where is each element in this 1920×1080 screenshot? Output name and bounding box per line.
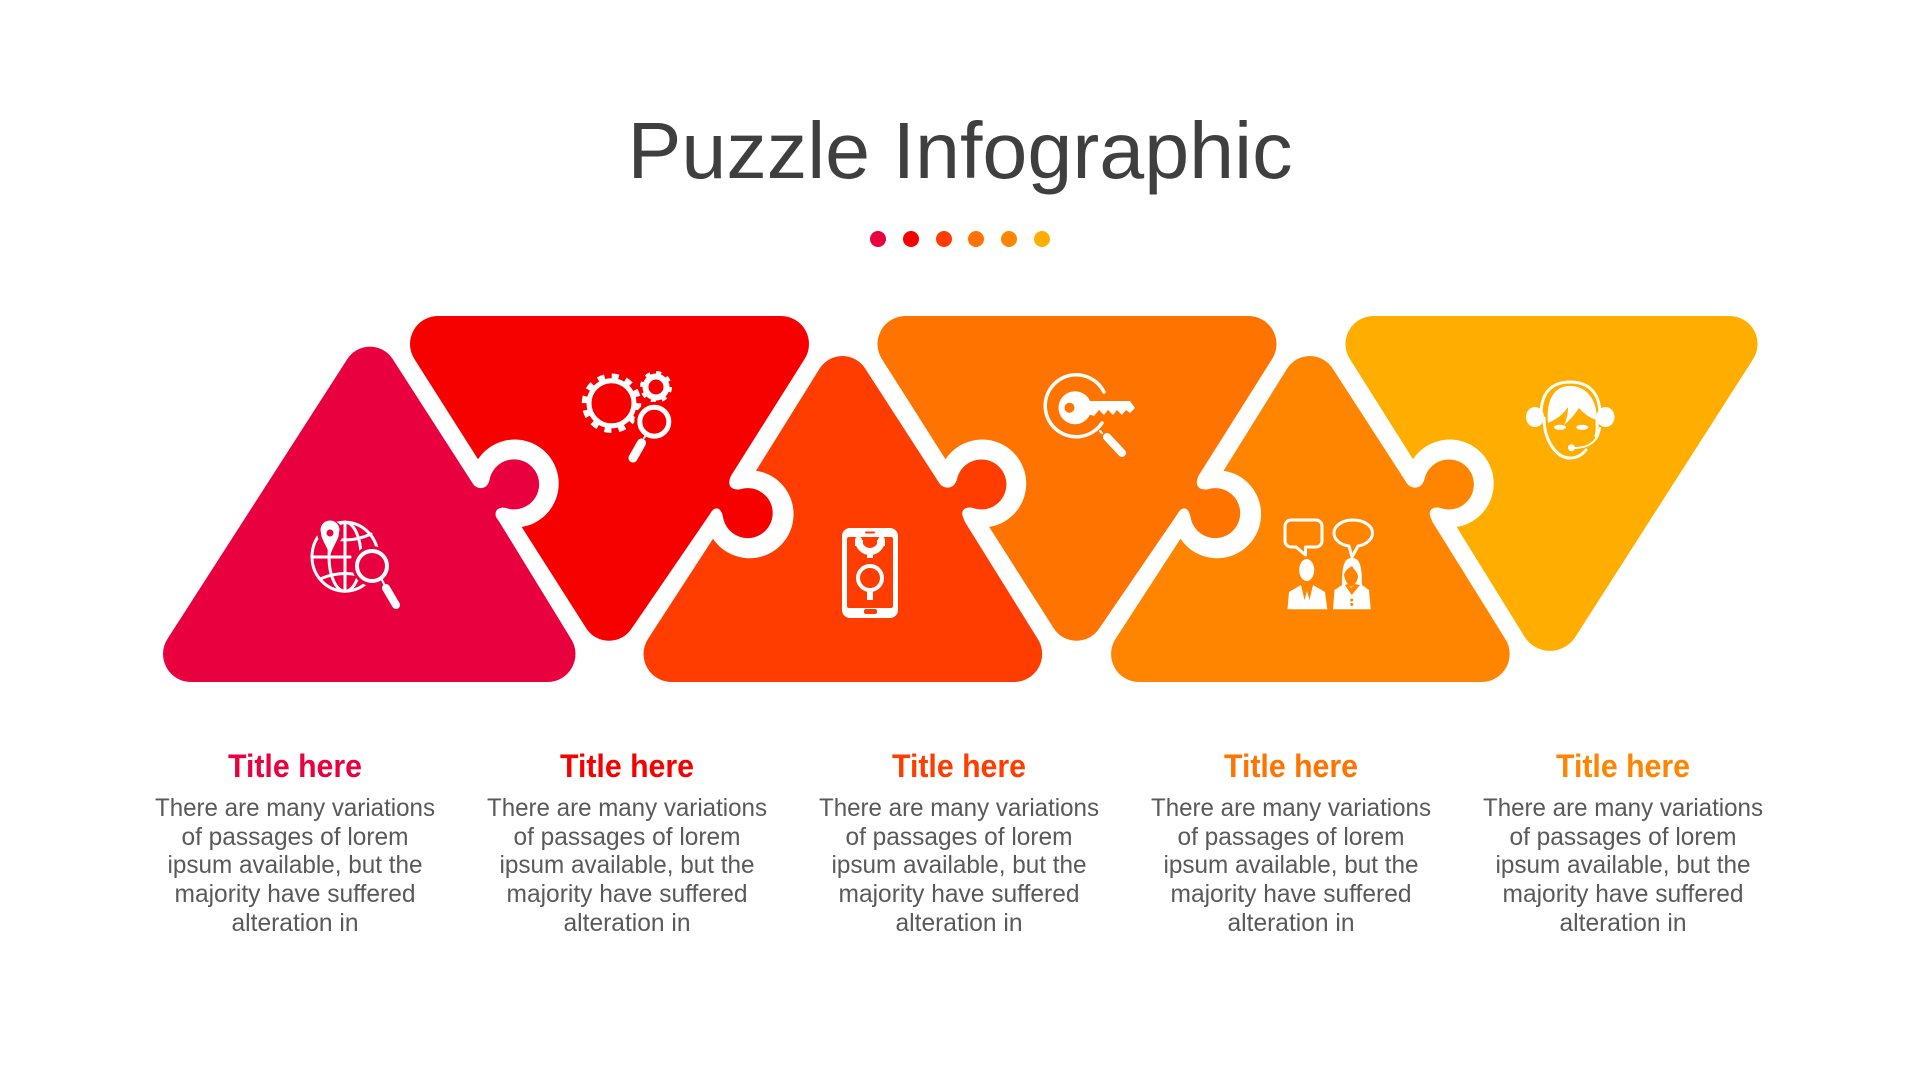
body text 3: majority have suffered bbox=[838, 880, 1080, 908]
panel: puzzle piece 2 with gears and magnifier icon bbox=[410, 316, 809, 641]
body text 4: There are many variations bbox=[1151, 794, 1431, 822]
body text 5: ipsum available, but the bbox=[1496, 851, 1750, 879]
heading 5: Title here bbox=[1556, 748, 1690, 784]
heading 4: Title here bbox=[1224, 748, 1358, 784]
panel: puzzle piece 4 with key icon bbox=[878, 316, 1276, 641]
text block 4 bbox=[1151, 748, 1431, 937]
heading 3: Title here bbox=[892, 748, 1026, 784]
text block 5 bbox=[1483, 748, 1763, 937]
icon: key in magnifier bbox=[1045, 375, 1135, 453]
body text 4: of passages of lorem bbox=[1178, 823, 1404, 851]
puzzle shape: red inverted triangle bbox=[410, 316, 809, 641]
icon: globe with pin and magnifier bbox=[312, 520, 396, 605]
icon: man and woman with speech bubbles bbox=[1285, 520, 1372, 609]
body text 1: of passages of lorem bbox=[182, 823, 408, 851]
body text 3: alteration in bbox=[896, 909, 1022, 937]
body text 2: majority have suffered bbox=[506, 880, 748, 908]
panel: puzzle piece 6 with headset agent icon bbox=[1346, 316, 1758, 651]
puzzle shape: orange-red triangle bbox=[644, 356, 1042, 682]
text block 1 bbox=[155, 748, 435, 937]
body text 5 bbox=[1483, 794, 1763, 937]
body text 2 bbox=[487, 794, 767, 937]
heading 1: Title here bbox=[228, 748, 362, 784]
icon: smartphone with gear and magnifier bbox=[842, 528, 898, 618]
decorative dot row under title bbox=[870, 231, 1050, 247]
text block 3 bbox=[819, 748, 1099, 937]
body text 1: alteration in bbox=[232, 909, 358, 937]
body text 5: majority have suffered bbox=[1502, 880, 1744, 908]
title: Puzzle Infographic bbox=[628, 106, 1292, 195]
panel: puzzle piece 1 with globe search icon bbox=[163, 347, 575, 682]
body text 1: There are many variations bbox=[155, 794, 435, 822]
heading 2: Title here bbox=[560, 748, 694, 784]
body text 4 bbox=[1151, 794, 1431, 937]
body text 2: alteration in bbox=[564, 909, 690, 937]
body text 3 bbox=[819, 794, 1099, 937]
body text 5: of passages of lorem bbox=[1510, 823, 1736, 851]
puzzle shape: amber-orange triangle bbox=[1111, 356, 1510, 682]
body text 2: There are many variations bbox=[487, 794, 767, 822]
icon: support agent with headset bbox=[1526, 382, 1614, 458]
body text 3: of passages of lorem bbox=[846, 823, 1072, 851]
body text 1 bbox=[155, 794, 435, 937]
body text 1: ipsum available, but the bbox=[168, 851, 422, 879]
puzzle shape: yellow inverted triangle bbox=[1346, 316, 1758, 651]
body text 3: There are many variations bbox=[819, 794, 1099, 822]
body text 4: alteration in bbox=[1228, 909, 1354, 937]
body text 2: ipsum available, but the bbox=[500, 851, 754, 879]
body text 4: majority have suffered bbox=[1170, 880, 1412, 908]
body text 2: of passages of lorem bbox=[514, 823, 740, 851]
body text 4: ipsum available, but the bbox=[1164, 851, 1418, 879]
panel: puzzle piece 5 with two people talking icon bbox=[1111, 356, 1510, 682]
panel: puzzle piece 3 with smartphone icon bbox=[644, 356, 1042, 682]
body text 1: majority have suffered bbox=[174, 880, 416, 908]
puzzle shape: orange inverted triangle bbox=[878, 316, 1276, 641]
puzzle shape: pink triangle bbox=[163, 347, 575, 682]
text block 2 bbox=[487, 748, 767, 937]
body text 5: alteration in bbox=[1560, 909, 1686, 937]
body text 3: ipsum available, but the bbox=[832, 851, 1086, 879]
body text 5: There are many variations bbox=[1483, 794, 1763, 822]
icon: gears and magnifier bbox=[584, 373, 674, 458]
